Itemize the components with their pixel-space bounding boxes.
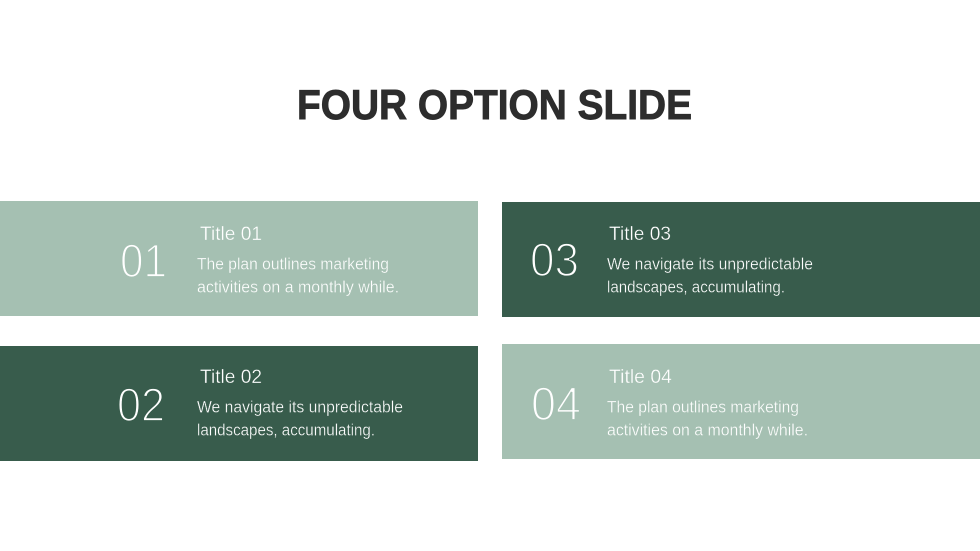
panel: option 04 (502, 344, 980, 459)
heading: Title 02: Title 02 (200, 367, 262, 388)
heading: Title 01: Title 01 (200, 224, 262, 245)
number 02: 02 (117, 378, 165, 431)
text: option 02 description: We navigate its unpredictable (197, 398, 403, 416)
text: option 01 description: activities on a monthly while. (197, 278, 399, 296)
text: option 04 description: activities on a monthly while. (607, 420, 808, 440)
heading: Title 03: Title 03 (609, 224, 671, 245)
text: option 02 description: landscapes, accumulating. (197, 420, 375, 440)
number 04: 04 (531, 377, 581, 430)
text: option 03 description: We navigate its unpredictable (607, 254, 813, 274)
panel: option 03 (502, 202, 980, 317)
panel: option 01 (0, 201, 478, 316)
title: FOUR OPTION SLIDE (297, 81, 692, 128)
number 01: 01 (120, 234, 167, 287)
number 03: 03 (530, 233, 579, 286)
panel: option 02 (0, 346, 478, 461)
heading: Title 04: Title 04 (609, 367, 672, 388)
text: option 03 description: landscapes, accumulating. (607, 278, 785, 296)
text: option 04 description: The plan outlines marketing (607, 398, 799, 416)
text: option 01 description: The plan outlines marketing (197, 254, 389, 274)
